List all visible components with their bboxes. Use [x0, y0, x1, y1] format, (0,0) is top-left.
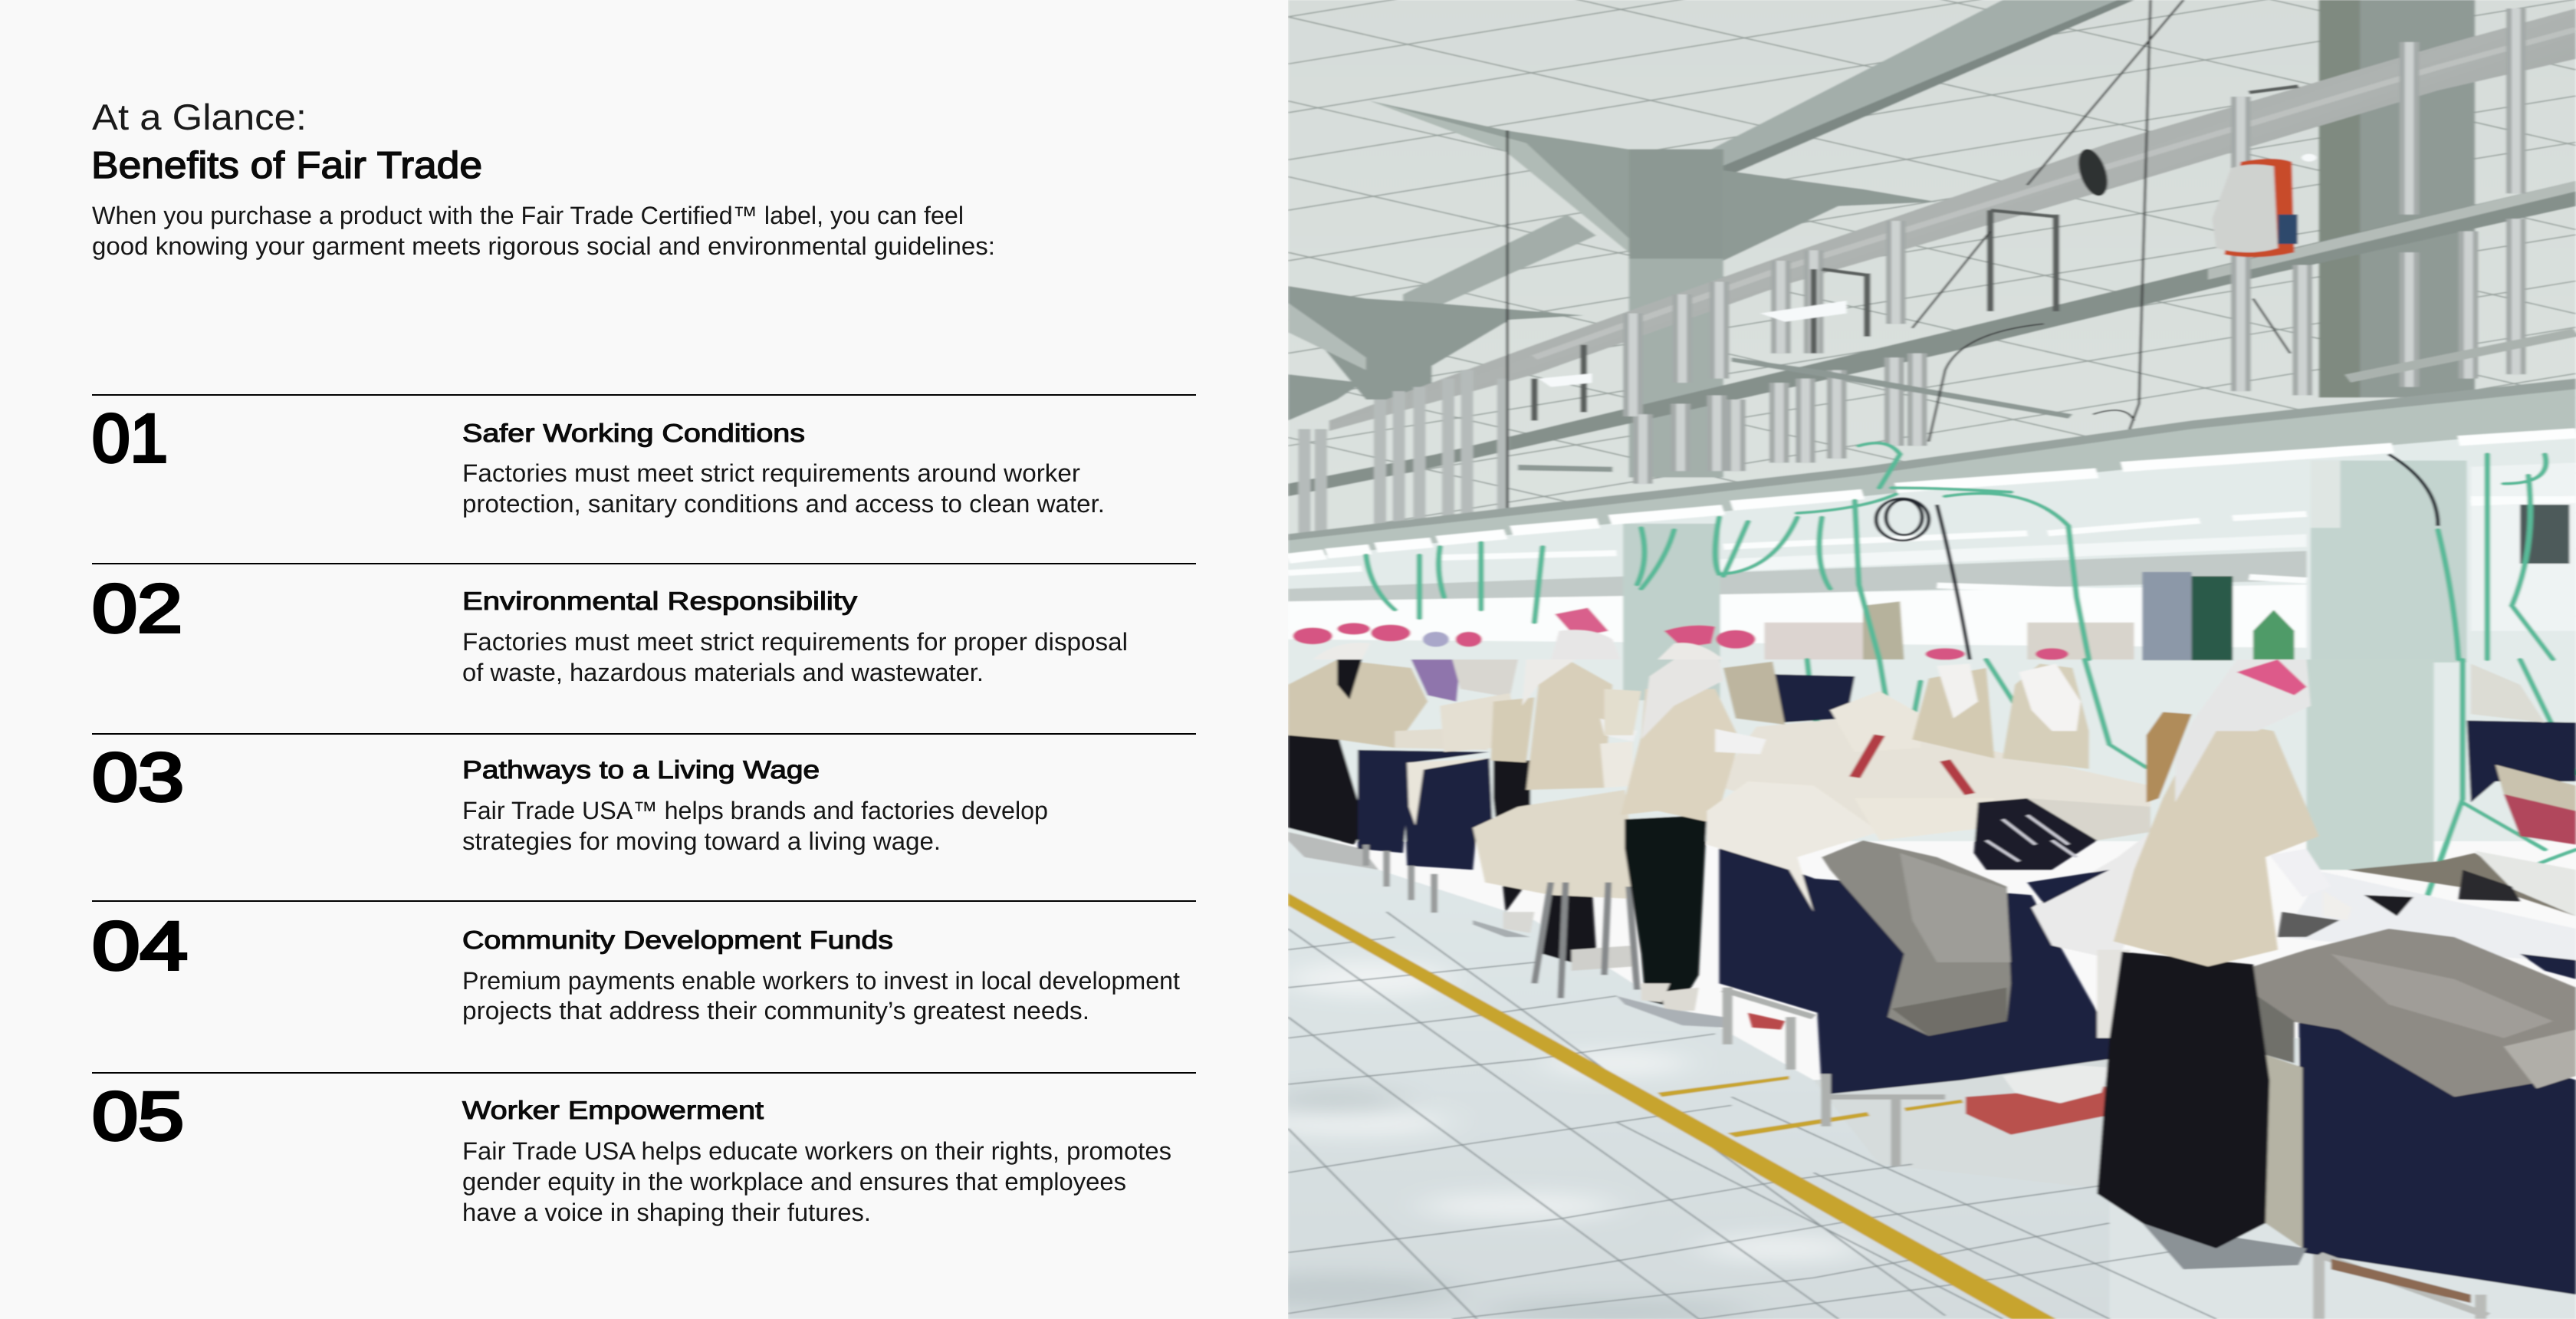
horizontal bar and lower struts [1518, 332, 2576, 472]
work lamp: orange [2212, 159, 2298, 257]
hanging wires [1507, 0, 2290, 518]
intro text: good knowing your garment meets rigorous social and environmental guidelines: [92, 232, 995, 260]
benefit 01: Factories must meet strict requirements around worker [462, 459, 1080, 487]
silver duct pipe [1329, 8, 2576, 431]
fluorescent tube racks [1304, 8, 2516, 535]
overhead rail [1288, 181, 2576, 496]
worker at third table [1473, 660, 1637, 971]
steel roof beams and brackets [1288, 0, 2475, 478]
benefit 02: of waste, hazardous materials and wastewater. [462, 659, 984, 686]
lamp rail [1288, 379, 2576, 559]
benefit 01: 01 [92, 400, 168, 476]
intro text [92, 202, 995, 260]
benefit 05: Worker Empowerment [462, 1096, 764, 1124]
right table with white top and grey pile [2253, 872, 2576, 1319]
yellow floor line [1288, 893, 2056, 1319]
photo: garment factory floor with workers [1288, 0, 2576, 1319]
ceiling light panels [1539, 154, 2316, 387]
distant lights [1288, 498, 2576, 592]
benefit 04: 04 [92, 907, 188, 984]
far left ironing tables [1358, 693, 1522, 913]
patterned dark garment [1974, 798, 2150, 870]
factory hall background [1288, 420, 2576, 841]
white cloth by main worker [2027, 832, 2159, 1038]
benefit 01: Safer Working Conditions [462, 419, 805, 447]
benefit 05 [92, 1072, 1196, 1226]
benefit 04: Premium payments enable workers to invest in local development [462, 967, 1180, 995]
intro text: When you purchase a product with the Fair Trade Certified™ label, you can feel [92, 202, 964, 229]
benefit 04: Community Development Funds [462, 926, 893, 954]
floor with tile seams [1214, 660, 2576, 1319]
benefit 05: have a voice in shaping their futures. [462, 1199, 871, 1226]
benefit 03: Pathways to a Living Wage [462, 755, 820, 784]
far left workers [1288, 660, 1518, 870]
heading: At a Glance: [92, 97, 307, 138]
benefit 03: 03 [92, 738, 184, 815]
benefit 05: 05 [92, 1077, 184, 1154]
benefit 02 [92, 563, 1196, 686]
back table and white fabric piles [1600, 662, 2150, 827]
benefit 04 [92, 900, 1196, 1025]
benefit 02: 02 [92, 570, 182, 646]
benefit 05: Fair Trade USA helps educate workers on their rights, promotes [462, 1137, 1171, 1165]
ceiling tiles [1288, 0, 2576, 735]
concrete pillars [1623, 461, 2467, 870]
benefit 03 [92, 733, 1196, 855]
benefit 05: gender equity in the workplace and ensures that employees [462, 1168, 1126, 1196]
panel: text column [91, 97, 1196, 1226]
grey folded fabric stack [1822, 840, 2011, 1036]
dark coil of cable [1876, 454, 2438, 660]
middle ironing tables [1707, 781, 2109, 1166]
benefit 03: strategies for moving toward a living wage. [462, 827, 941, 855]
benefit 04: projects that address their community’s greatest needs. [462, 997, 1089, 1025]
distant worker heads [1293, 608, 2068, 660]
benefit 01: protection, sanitary conditions and access to clean water. [462, 490, 1105, 518]
right background: table and machine [2348, 663, 2576, 916]
white fabric over stools [1473, 790, 1641, 998]
benefit 02: Environmental Responsibility [462, 587, 858, 615]
benefit 02: Factories must meet strict requirements for proper disposal [462, 628, 1128, 656]
main foreground worker [2097, 660, 2413, 1269]
benefit 03: Fair Trade USA™ helps brands and factories develop [462, 797, 1048, 824]
heading: Benefits of Fair Trade [91, 145, 482, 186]
heading [91, 97, 482, 186]
benefit 01 [92, 394, 1196, 518]
green hoses [1366, 443, 2576, 912]
center worker [1617, 660, 1766, 1028]
